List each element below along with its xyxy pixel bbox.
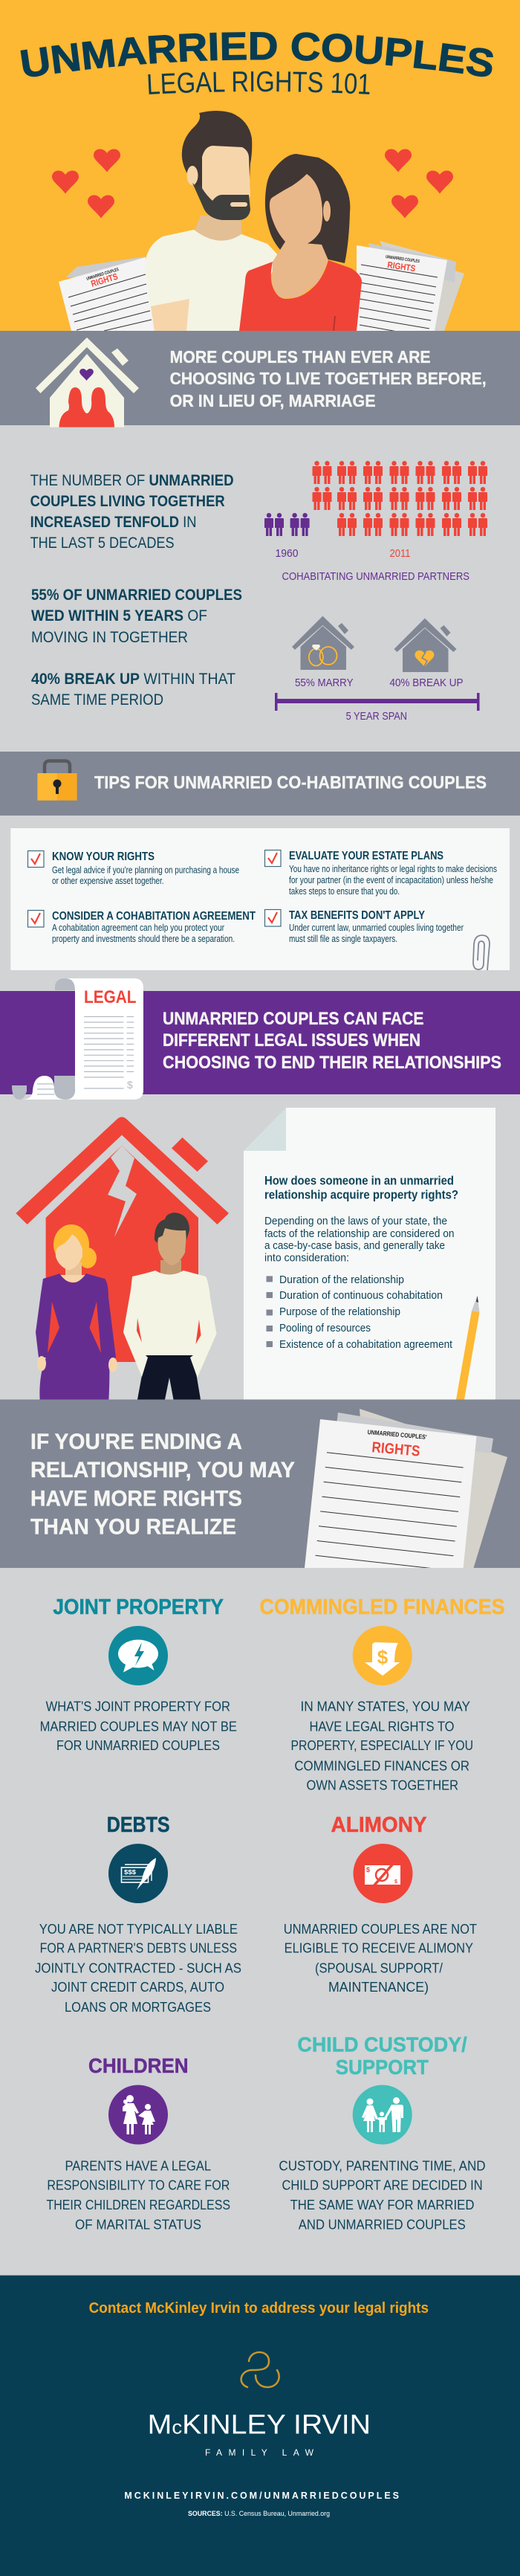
chart: pictogram of cohabiting partners: 1960 [275, 547, 299, 560]
sources: SOURCES: U.S. Census Bureau, Unmarried.org [188, 2510, 330, 2518]
section: child custody: AND UNMARRIED COUPLES [299, 2217, 466, 2232]
panel: footer [0, 2276, 520, 2576]
tip: know your rights: KNOW YOUR RIGHTS [52, 850, 155, 863]
title: UNMARRIED COUPLES [21, 32, 493, 77]
woman in purple dress [36, 1224, 117, 1399]
note body [264, 1215, 455, 1265]
note bullet list: Duration of the relationship [279, 1274, 404, 1286]
section: children [46, 2054, 230, 2232]
text: 55 percent [31, 587, 242, 646]
chart: five year outcomes: 55% MARRY [295, 677, 354, 689]
tip: tax benefits: Under current law, unmarried couples living together [289, 923, 464, 933]
document: right rights paper: RIGHTS [387, 259, 416, 274]
note bullet list: Duration of continuous cohabitation [279, 1289, 443, 1302]
illustration: broken house with couple [16, 1117, 229, 1399]
document: rights papers [305, 1409, 507, 1571]
section: joint property: JOINT PROPERTY [53, 1595, 224, 1619]
document: left rights paper [59, 256, 154, 331]
section: joint property [40, 1595, 237, 1753]
icon: padlock [37, 761, 77, 801]
tip: estate plans: takes steps to ensure that you do. [289, 886, 400, 897]
section: joint property: WHAT'S JOINT PROPERTY FOR [46, 1699, 230, 1714]
section: joint property: FOR UNMARRIED COUPLES [56, 1738, 220, 1753]
section: alimony: (SPOUSAL SUPPORT/ [315, 1961, 443, 1976]
icon: crossed out banknote [354, 1844, 413, 1903]
panel: header [0, 0, 520, 331]
panel: tips band: TIPS FOR UNMARRIED CO-HABITATING COUPLES [94, 773, 487, 793]
text: 55 percent: WED WITHIN 5 YEARS OF [31, 607, 207, 624]
chart: five year outcomes: 40% BREAK UP [389, 677, 464, 689]
website: MCKINLEYIRVIN.COM/UNMARRIEDCOUPLES [124, 2491, 399, 2501]
section: commingled finances: OWN ASSETS TOGETHER [306, 1778, 458, 1793]
text: tenfold: INCREASED TENFOLD IN [30, 514, 197, 531]
section: child custody [279, 2033, 486, 2232]
tip: tax benefits: must still file as single taxpayers. [289, 934, 397, 944]
note bullet list: Pooling of resources [279, 1322, 371, 1334]
section: debts: DEBTS [107, 1813, 170, 1837]
section: debts: FOR A PARTNER'S DEBTS UNLESS [40, 1941, 237, 1956]
note bullet list: Purpose of the relationship [279, 1305, 400, 1318]
icon: family [353, 2085, 412, 2144]
chart: five year outcomes [275, 616, 480, 723]
tip: know your rights: or other expensive asset together. [52, 876, 163, 886]
section: child custody: CHILD CUSTODY/ [297, 2033, 467, 2056]
hearts [52, 149, 453, 219]
section: commingled finances: PROPERTY, ESPECIALLY IF YOU [291, 1738, 473, 1753]
document: right rights paper [357, 241, 464, 332]
icon: mother and children [108, 2085, 168, 2144]
icon: cheque and pen: $$$ [124, 1869, 137, 1876]
icon: crossed out banknote: $ [394, 1879, 397, 1885]
panel: tips band [0, 752, 520, 816]
panel: legal issues band: DIFFERENT LEGAL ISSUES WHEN [163, 1030, 420, 1050]
section: alimony: UNMARRIED COUPLES ARE NOT [284, 1922, 477, 1937]
chart: pictogram of cohabiting partners [264, 461, 487, 583]
section: alimony: MAINTENANCE) [328, 1980, 429, 1995]
broken red house [16, 1117, 229, 1362]
section: debts: JOINT CREDIT CARDS, AUTO [51, 1980, 224, 1995]
band text: THAN YOU REALIZE [30, 1515, 236, 1540]
panel: intro band [0, 331, 520, 427]
text: tenfold: THE LAST 5 DECADES [30, 535, 175, 552]
tip: cohabitation agreement: property and investments should there be a separation. [52, 934, 235, 944]
section: children: RESPONSIBILITY TO CARE FOR [47, 2178, 230, 2193]
section: children: THEIR CHILDREN REGARDLESS [46, 2198, 230, 2212]
band text: HAVE MORE RIGHTS [30, 1487, 242, 1511]
tip: cohabitation agreement [28, 910, 256, 944]
section: child custody: THE SAME WAY FOR MARRIED [290, 2198, 474, 2212]
section: alimony [284, 1813, 477, 1995]
section: debts: YOU ARE NOT TYPICALLY LIABLE [39, 1922, 238, 1937]
section: joint property: MARRIED COUPLES MAY NOT BE [40, 1719, 237, 1734]
intro text: MORE COUPLES THAN EVER ARE [170, 347, 431, 367]
section: children: PARENTS HAVE A LEGAL [65, 2159, 211, 2174]
document: left rights paper: UNMARRIED COUPLES [86, 268, 120, 282]
text: tenfold: COUPLES LIVING TOGETHER [30, 493, 225, 510]
icon: dollar arrow [353, 1626, 412, 1685]
section: commingled finances: COMMINGLED FINANCES OR [294, 1759, 469, 1774]
intro text: OR IN LIEU OF, MARRIAGE [170, 391, 376, 410]
panel: property rights note [244, 1108, 495, 1399]
section: children: OF MARITAL STATUS [75, 2217, 201, 2232]
icon: house with broken heart [394, 619, 456, 672]
note bullet list: Existence of a cohabitation agreement [279, 1338, 453, 1351]
section: commingled finances: HAVE LEGAL RIGHTS TO [309, 1719, 455, 1734]
note heading [264, 1175, 458, 1201]
chart: pictogram of cohabiting partners: COHABITATING UNMARRIED PARTNERS [282, 570, 469, 583]
document: right rights paper: UNMARRIED COUPLES [386, 255, 420, 264]
section: alimony: ELIGIBLE TO RECEIVE ALIMONY [285, 1941, 473, 1956]
band text [30, 1430, 295, 1540]
section: child custody: SUPPORT [336, 2056, 429, 2079]
section: commingled finances: IN MANY STATES, YOU MAY [300, 1699, 470, 1714]
band text: RELATIONSHIP, YOU MAY [30, 1458, 295, 1482]
section: alimony: ALIMONY [331, 1813, 427, 1837]
section: debts [35, 1813, 241, 2015]
icon: dollar arrow: $ [377, 1646, 389, 1668]
note heading: relationship acquire property rights? [264, 1188, 458, 1201]
tip: cohabitation agreement: CONSIDER A COHABITATION AGREEMENT [52, 910, 256, 923]
document: left rights paper: RIGHTS [90, 271, 119, 289]
document: rights papers: UNMARRIED COUPLES' [367, 1428, 427, 1441]
tip: estate plans [264, 850, 497, 897]
tip: cohabitation agreement: A cohabitation agreement can help you protect your [52, 923, 224, 933]
section: debts: JOINTLY CONTRACTED - SUCH AS [35, 1961, 241, 1976]
text: tenfold: THE NUMBER OF UNMARRIED [30, 472, 234, 489]
intro text: CHOOSING TO LIVE TOGETHER BEFORE, [170, 369, 487, 388]
man in cream sweater [123, 1213, 217, 1399]
icon: legal scroll: LEGAL [84, 987, 137, 1007]
logo mark [241, 2352, 279, 2387]
note heading: How does someone in an unmarried [264, 1175, 454, 1188]
note bullet list [266, 1274, 453, 1351]
logo tagline: FAMILY LAW [205, 2447, 314, 2458]
logo wordmark: McKINLEY IRVIN [148, 2409, 371, 2439]
section: debts: LOANS OR MORTGAGES [65, 2000, 211, 2015]
illustration: woman [239, 154, 362, 331]
icon: paperclip [473, 935, 490, 970]
text: 40 percent [31, 671, 235, 708]
panel: legal issues band: UNMARRIED COUPLES CAN FACE [163, 1009, 423, 1029]
call to action: Contact McKinley Irvin to address your legal rights [89, 2300, 429, 2317]
document: rights papers: RIGHTS [371, 1439, 420, 1460]
intro text [170, 347, 487, 410]
note body: into consideration: [264, 1252, 349, 1265]
section: child custody: CHILD SUPPORT ARE DECIDED IN [282, 2178, 483, 2193]
note body: facts of the relationship are considered on [264, 1227, 455, 1240]
note body: a case-by-case basis, and generally take [264, 1239, 445, 1252]
icon: crossed out banknote: $ [366, 1866, 370, 1873]
section: child custody: CUSTODY, PARENTING TIME, AND [279, 2159, 486, 2174]
note body: Depending on the laws of your state, the [264, 1215, 447, 1227]
illustration: man [145, 111, 279, 331]
text: 55 percent: 55% OF UNMARRIED COUPLES [31, 587, 242, 604]
panel: statistics text [30, 472, 242, 708]
icon: argument bubble [108, 1626, 168, 1685]
tip: estate plans: EVALUATE YOUR ESTATE PLANS [289, 850, 443, 862]
icon: pencil [456, 1296, 480, 1399]
tip: know your rights [28, 850, 239, 886]
text: 40 percent: 40% BREAK UP WITHIN THAT [31, 671, 235, 688]
icon: legal scroll: $ [127, 1079, 133, 1091]
panel: legal issues band [0, 978, 520, 1100]
chart: five year outcomes: 5 YEAR SPAN [346, 710, 407, 723]
text: tenfold [30, 472, 234, 552]
icon: house with rings [292, 616, 354, 670]
text: 40 percent: SAME TIME PERIOD [31, 691, 163, 708]
tip: tax benefits: TAX BENEFITS DON'T APPLY [289, 909, 425, 922]
section: children: CHILDREN [88, 2054, 189, 2077]
text: 55 percent: MOVING IN TOGETHER [31, 629, 188, 646]
icon: legal scroll [12, 978, 143, 1100]
panel: more rights band [0, 1399, 520, 1571]
tip: tax benefits [264, 909, 464, 944]
band text: IF YOU'RE ENDING A [30, 1430, 242, 1454]
icon: house with couple [36, 338, 139, 427]
tip: know your rights: Get legal advice if you're planning on purchasing a house [52, 865, 239, 875]
icon: cheque and pen [108, 1844, 168, 1903]
span bar [275, 693, 480, 711]
subtitle: LEGAL RIGHTS 101 [148, 71, 370, 94]
chart: pictogram of cohabiting partners: 2011 [389, 547, 410, 560]
section: commingled finances: COMMINGLED FINANCES [260, 1595, 505, 1619]
panel: tips checklist [10, 828, 510, 970]
section: commingled finances [260, 1595, 505, 1793]
